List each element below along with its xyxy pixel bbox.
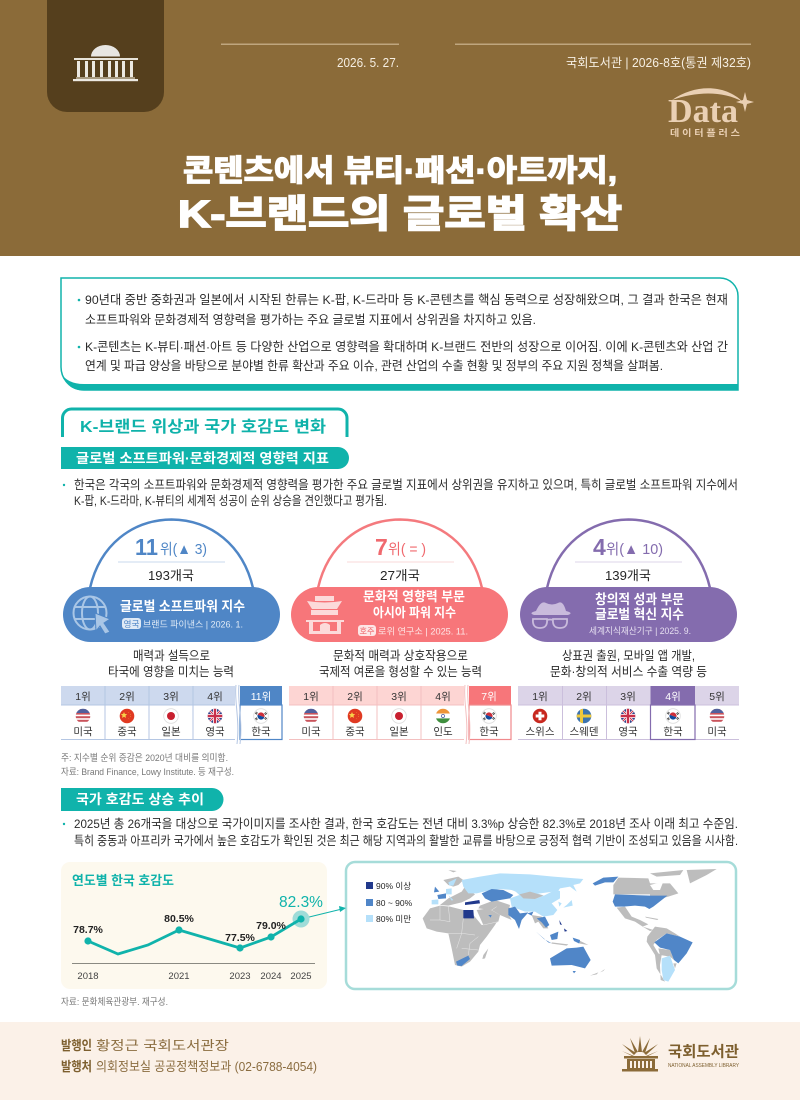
rank dome: 11	[135, 534, 158, 560]
description	[108, 649, 234, 679]
rank table: 3위	[620, 690, 636, 703]
publisher: 황정근 국회도서관장	[96, 1038, 229, 1053]
footnote: 주: 지수별 순위 증감은 2020년 대비를 의미함.	[61, 752, 228, 764]
rank table: 3위	[163, 690, 179, 703]
subheading: soft power: 글로벌 소프트파워·문화경제적 영향력 지표	[76, 451, 329, 466]
map legend: 80% 미만	[376, 914, 411, 924]
subheading: favorability	[61, 788, 224, 811]
description	[550, 649, 707, 679]
Data plus logo: 데 이 터 플 러 스	[670, 127, 740, 138]
library logo: 국회도서관	[668, 1044, 739, 1060]
rank table: 4위	[665, 690, 681, 703]
footer	[0, 1022, 800, 1100]
rank table: 중국	[345, 726, 365, 738]
description: 국제적 여론을 형성할 수 있는 능력	[319, 665, 482, 679]
index pill	[520, 587, 737, 642]
footnote	[61, 752, 234, 778]
panel: global soft power index	[61, 520, 282, 744]
index pill: 호주	[360, 626, 375, 636]
description: 문화·창의적 서비스 수출 역량 등	[550, 665, 707, 679]
index pill: 브랜드 파이낸스 | 2026. 1.	[143, 620, 243, 630]
index pill	[291, 587, 508, 642]
rank dome: 193개국	[148, 568, 194, 583]
rank dome: 7	[375, 534, 388, 560]
rank table: 4위	[435, 690, 451, 703]
pointer to map	[301, 909, 342, 919]
rank table	[518, 686, 739, 740]
panel: global innovation index	[518, 520, 739, 740]
line chart: yearly favorability: 82.3%	[279, 894, 323, 911]
rank table: 2위	[576, 690, 592, 703]
rank table: 1위	[303, 690, 319, 703]
line chart: yearly favorability: 79.0%	[256, 920, 287, 932]
rank table: 1위	[532, 690, 548, 703]
rank table: 11위	[251, 690, 271, 703]
rank table: 미국	[73, 726, 93, 738]
rank table: 2위	[119, 690, 135, 703]
rank table: 1위	[75, 690, 91, 703]
index pill: 로위 연구소 | 2025. 11.	[378, 626, 468, 636]
section heading: K-브랜드 위상과 국가 호감도 변화	[80, 418, 326, 436]
publisher: 발행인	[61, 1038, 92, 1053]
rank table: 5위	[709, 690, 725, 703]
summary bullets: 연계 및 파급 양상을 바탕으로 분야별 한류 확산과 주요 이슈, 관련 산업의 수출 현황 및 정부의 주요 지원 정책을 살펴봄.	[85, 358, 663, 373]
rank dome: 위(▲ 10)	[606, 541, 663, 558]
issuer: 의회정보실 공공정책정보과 (02-6788-4054)	[96, 1059, 317, 1074]
library logo	[622, 1036, 740, 1072]
rank dome: 위(▲ 3)	[160, 541, 207, 558]
logo tab	[47, 0, 164, 112]
subheading: favorability: 국가 호감도 상승 추이	[76, 792, 204, 807]
rank table: 미국	[707, 726, 727, 738]
rank dome: 27개국	[380, 568, 420, 583]
line chart: yearly favorability: 80.5%	[164, 913, 195, 925]
panel: world map	[339, 862, 736, 989]
description	[319, 649, 482, 679]
description: 매력과 설득으로	[133, 649, 210, 663]
rank dome	[318, 520, 482, 588]
footnote: 자료: Brand Finance, Lowy Institute. 등 재구성.	[61, 767, 234, 778]
index pill: 창의적 성과 부문	[595, 592, 684, 607]
issuer: 발행처	[61, 1059, 92, 1074]
favorability paragraph: 2025년 총 26개국을 대상으로 국가이미지를 조사한 결과, 한국 호감도는 전년 대비 3.3%p 상승한 82.3%로 2018년 조사 이래 최고 수준임.	[74, 817, 738, 831]
line chart: yearly favorability: 2018	[77, 971, 99, 982]
rank dome	[90, 520, 253, 588]
index pill: 영국	[124, 619, 140, 629]
line chart: yearly favorability: 2023	[229, 971, 251, 982]
rank table: 영국	[205, 726, 225, 738]
icon: library emblem	[622, 1036, 658, 1072]
rank dome	[547, 520, 710, 588]
panel: summary box	[61, 278, 738, 390]
rank table: 3위	[391, 690, 407, 703]
rank table: 인도	[433, 726, 453, 738]
index pill: 세계지식재산기구 | 2025. 9.	[589, 625, 691, 636]
rank table: 2위	[347, 690, 363, 703]
section heading	[62, 409, 347, 437]
rank table	[289, 685, 511, 744]
soft power paragraph: K-팝, K-드라마, K-뷰티의 세계적 성공이 순위 상승을 견인했다고 평가됨.	[74, 493, 387, 508]
line chart: yearly favorability: 2025	[290, 971, 312, 982]
soft power paragraph: 한국은 각국의 소프트파워와 문화경제적 영향력을 평가한 주요 글로벌 지표에서 상위권을 유지하고 있으며, 특히 글로벌 소프트파워 지수에서	[74, 478, 738, 492]
description: 상표권 출원, 모바일 앱 개발,	[562, 649, 695, 663]
issue info: 국회도서관 | 2026-8호(통권 제32호)	[566, 56, 751, 70]
index pill: 글로벌 혁신 지수	[595, 607, 684, 622]
subheading: soft power	[61, 447, 349, 469]
summary bullets	[78, 292, 728, 373]
rank dome: 위( = )	[388, 541, 426, 558]
rank table: 중국	[117, 726, 137, 738]
title: 콘텐츠에서 뷰티·패션·아트까지,	[183, 155, 617, 188]
rank table: 미국	[301, 726, 321, 738]
Data plus logo	[668, 88, 754, 138]
rank dome: 139개국	[605, 568, 651, 583]
rank table: 스위스	[526, 725, 555, 738]
summary bullets: 90년대 중반 중화권과 일본에서 시작된 한류는 K-팝, K-드라마 등 K-콘텐츠를 핵심 동력으로 성장해왔으며, 그 결과 한국은 현재	[85, 292, 728, 307]
header band	[0, 0, 800, 256]
icon: assembly building	[73, 45, 138, 81]
soft power paragraph	[63, 478, 738, 508]
rank table: 한국	[251, 726, 271, 738]
map legend	[366, 881, 413, 924]
header rules	[221, 44, 751, 45]
map: western hemisphere	[590, 869, 717, 982]
description: 타국에 영향을 미치는 능력	[108, 665, 234, 679]
rank table: 7위	[481, 690, 497, 703]
icon: traditional gate	[306, 596, 344, 634]
publisher	[61, 1038, 229, 1053]
description: 문화적 매력과 상호작용으로	[333, 649, 468, 663]
map source note: 자료: 문화체육관광부. 재구성.	[61, 996, 168, 1008]
rank table: 영국	[618, 726, 638, 738]
rank table: 한국	[663, 726, 683, 738]
map: eastern hemisphere	[423, 870, 591, 973]
icon: globe cursor	[74, 596, 110, 634]
rank dome: 4	[593, 534, 606, 560]
line chart: yearly favorability: 연도별 한국 호감도	[72, 873, 174, 888]
line chart: yearly favorability: 77.5%	[225, 932, 256, 944]
index pill	[63, 587, 280, 642]
rank table: 한국	[479, 726, 499, 738]
favorability paragraph: 특히 중동과 아프리카 국가에서 높은 호감도가 확인된 것은 최근 해당 지역과의 활발한 교류를 바탕으로 긍정적 협력 기반이 조성되고 있음을 시사함.	[74, 834, 738, 848]
index pill: 아시아 파워 지수	[373, 605, 456, 620]
library logo: NATIONAL ASSEMBLY LIBRARY	[668, 1063, 740, 1069]
map legend: 90% 이상	[376, 881, 411, 891]
panel: cultural influence index	[289, 520, 511, 744]
map legend: 80 ~ 90%	[376, 898, 413, 908]
line chart: yearly favorability	[61, 862, 342, 989]
publication date: 2026. 5. 27.	[337, 56, 399, 70]
title	[178, 155, 622, 236]
title: K-브랜드의 글로벌 확산	[178, 194, 622, 236]
rank table	[61, 685, 282, 744]
line chart: yearly favorability: 2021	[168, 971, 190, 982]
line chart: yearly favorability: 78.7%	[73, 924, 104, 936]
index pill: 문화적 영향력 부문	[363, 589, 465, 604]
icon: hat and glasses	[531, 602, 571, 628]
rank table: 일본	[389, 725, 409, 738]
line chart: yearly favorability: 2024	[260, 971, 282, 982]
summary bullets: K-콘텐츠는 K-뷰티·패션·아트 등 다양한 산업으로 영향력을 확대하며 K-브랜드 전반의 성장으로 이어짐. 이에 K-콘텐츠와 산업 간	[85, 340, 728, 354]
index pill: 글로벌 소프트파워 지수	[120, 599, 245, 614]
summary bullets: 소프트파워와 문화경제적 영향력을 평가하는 주요 글로벌 지표에서 상위권을 차지하고 있음.	[85, 313, 536, 327]
favorability paragraph	[63, 817, 738, 848]
rank table: 스웨덴	[570, 726, 598, 738]
rank table: 일본	[161, 725, 181, 738]
rank table: 4위	[207, 690, 223, 703]
Data plus logo: Data	[668, 93, 738, 130]
